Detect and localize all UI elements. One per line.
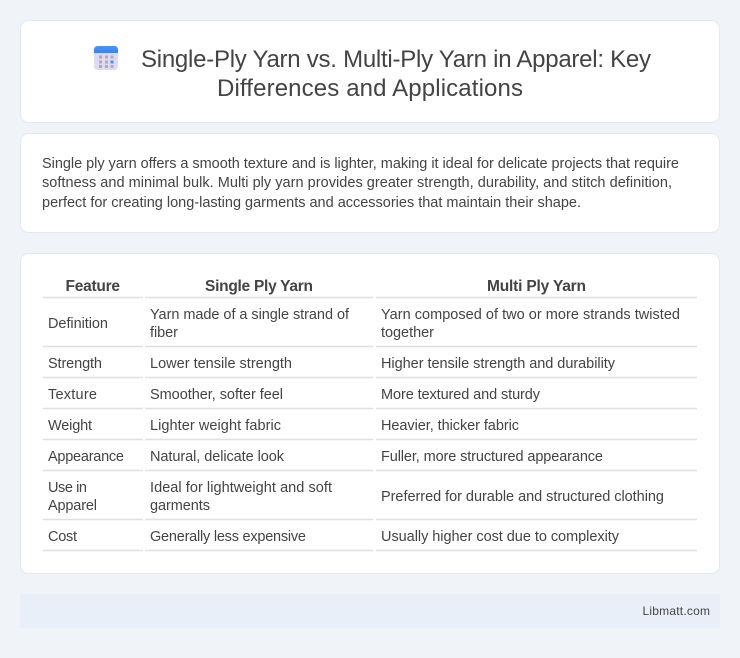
title bbox=[141, 46, 651, 102]
row: use in apparel: Use in bbox=[48, 480, 87, 496]
panel: comparison table bbox=[20, 254, 720, 574]
table header: Single Ply Yarn bbox=[205, 278, 313, 295]
row: use in apparel: Preferred for durable and structured clothing bbox=[381, 489, 664, 505]
row: cost: Cost bbox=[48, 529, 77, 545]
row: appearance bbox=[43, 449, 697, 470]
row: cost bbox=[43, 529, 697, 550]
row: cost: Generally less expensive bbox=[150, 529, 306, 545]
row: appearance: Natural, delicate look bbox=[150, 449, 285, 465]
row: weight: Weight bbox=[48, 418, 92, 434]
row: definition: fiber bbox=[150, 325, 178, 341]
title: Differences and Applications bbox=[217, 75, 523, 102]
row: strength: Lower tensile strength bbox=[150, 356, 292, 372]
panel: title card bbox=[20, 20, 720, 122]
panel: summary paragraph bbox=[20, 134, 720, 232]
row: weight: Heavier, thicker fabric bbox=[381, 418, 519, 434]
panel: summary paragraph: perfect for creating long-lasting garments and accessories that maintain their shape. bbox=[42, 195, 581, 211]
row: texture: More textured and sturdy bbox=[381, 387, 541, 403]
row: definition: Yarn composed of two or more strands twisted bbox=[381, 307, 680, 323]
table header: Feature bbox=[66, 278, 120, 295]
footer bar bbox=[20, 594, 720, 628]
row: texture bbox=[43, 387, 697, 408]
row: strength: Higher tensile strength and durability bbox=[381, 356, 616, 372]
row: definition: Definition bbox=[48, 316, 108, 332]
row: use in apparel bbox=[43, 480, 697, 520]
row: strength: Strength bbox=[48, 356, 102, 372]
row: texture: Smoother, softer feel bbox=[150, 387, 283, 403]
row: definition: together bbox=[381, 325, 434, 341]
panel: summary paragraph: Single ply yarn offers a smooth texture and is lighter, making it ideal for delicate projects that require bbox=[42, 156, 679, 172]
panel: summary paragraph: softness and minimal bulk. Multi ply yarn provides greater strength, durability, and stitch definition, bbox=[42, 175, 672, 191]
row: weight: Lighter weight fabric bbox=[150, 418, 281, 434]
title: Single-Ply Yarn vs. Multi-Ply Yarn in Apparel: Key bbox=[141, 46, 651, 73]
row: appearance: Fuller, more structured appearance bbox=[381, 449, 603, 465]
table header bbox=[43, 278, 697, 298]
row: use in apparel: Ideal for lightweight and soft bbox=[150, 480, 332, 496]
row: weight bbox=[43, 418, 697, 440]
row: definition: Yarn made of a single strand of bbox=[150, 307, 350, 323]
row: texture: Texture bbox=[48, 387, 97, 403]
row: appearance: Appearance bbox=[48, 449, 124, 465]
row: cost: Usually higher cost due to complexity bbox=[381, 529, 620, 545]
row: definition bbox=[43, 307, 697, 346]
row: strength bbox=[43, 356, 697, 378]
row: use in apparel: Apparel bbox=[48, 498, 97, 514]
footer source text: Libmatt.com bbox=[642, 604, 710, 618]
table header: Multi Ply Yarn bbox=[487, 278, 586, 295]
icon: calendar bbox=[94, 46, 118, 70]
row: use in apparel: garments bbox=[150, 498, 210, 514]
